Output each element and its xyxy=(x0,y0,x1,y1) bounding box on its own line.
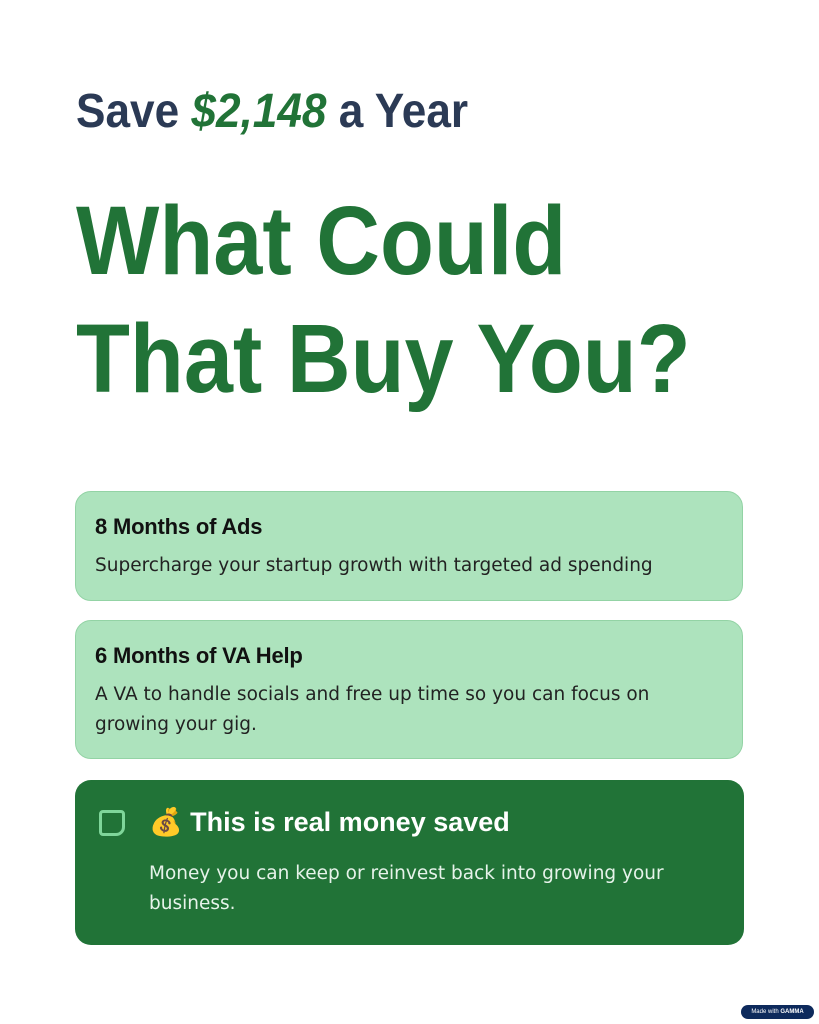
card: VA: 6 Months of VA Help xyxy=(95,643,303,668)
title xyxy=(76,186,691,413)
card: VA: A VA to handle socials and free up time so you can focus on growing your gig. xyxy=(95,684,649,735)
title: That Buy You? xyxy=(76,304,691,413)
badge: made with gamma xyxy=(741,1005,814,1019)
title: What Could xyxy=(76,186,566,295)
card: VA xyxy=(75,620,743,759)
callout: real money xyxy=(75,780,744,945)
card: ads xyxy=(75,491,743,601)
subtitle: Save $2,148 a Year xyxy=(76,85,468,138)
callout text: Money you can keep or reinvest back into growing your business. xyxy=(149,863,664,914)
card: ads: Supercharge your startup growth with targeted ad spending xyxy=(95,555,653,576)
card: ads: 8 Months of Ads xyxy=(95,514,262,539)
icon: note xyxy=(99,810,125,836)
callout heading: 💰 This is real money saved xyxy=(149,807,510,837)
badge: made with gamma: Made with GAMMA xyxy=(751,1009,804,1015)
